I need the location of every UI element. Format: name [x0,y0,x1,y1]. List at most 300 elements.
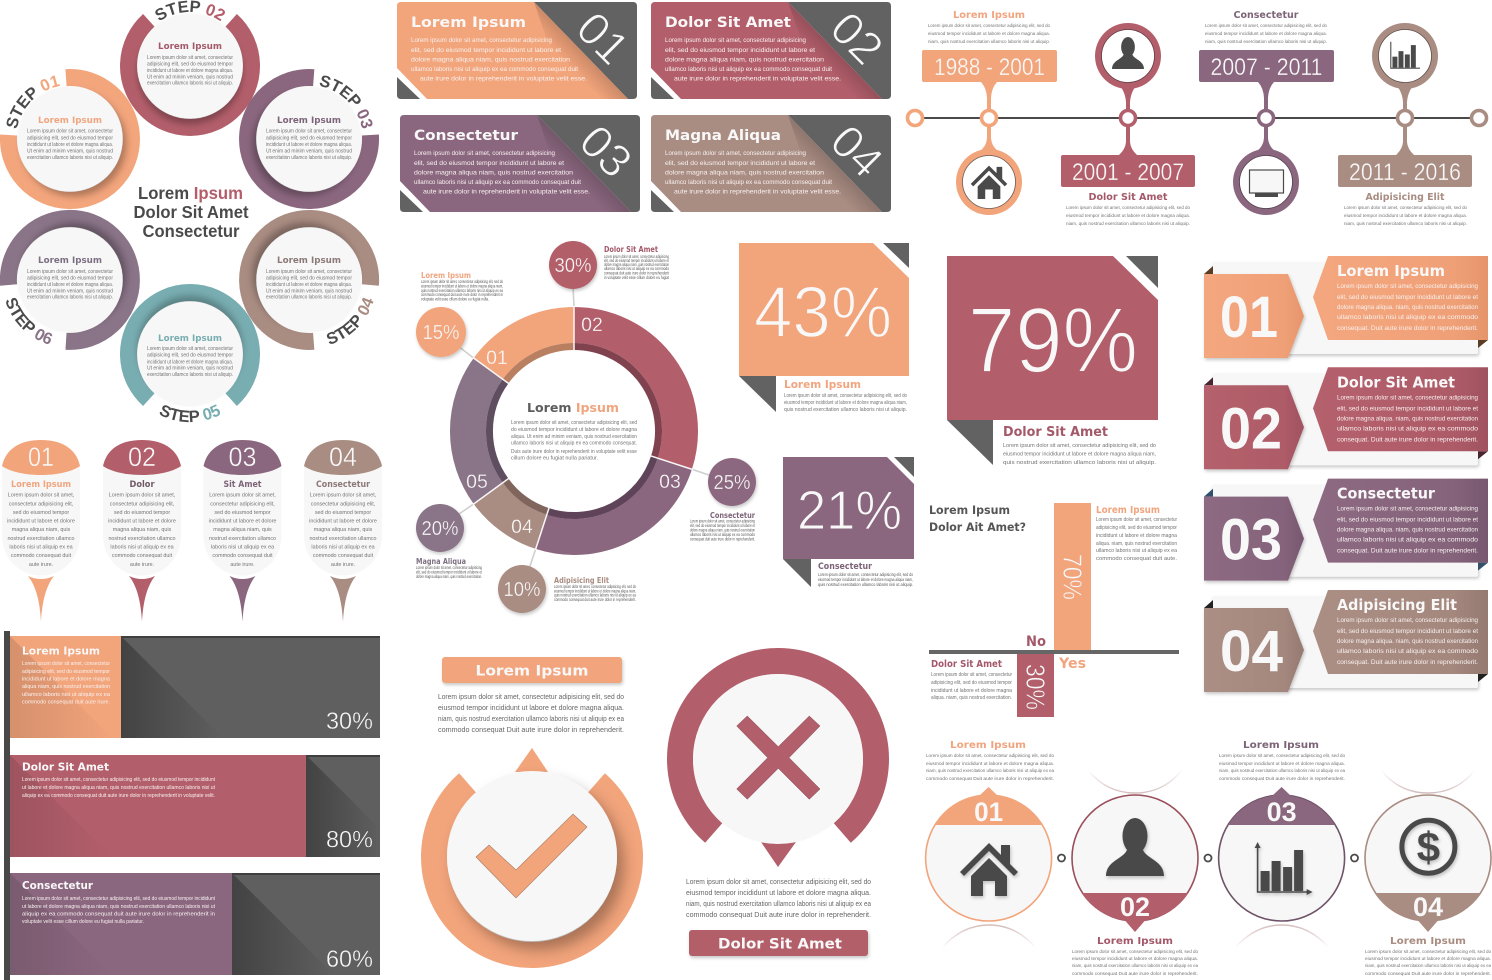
icon: monitor [1250,170,1284,197]
icon: home [960,843,1018,896]
card 03: Consectetur [414,127,519,144]
text: Lorem Ipsum: ullamco laboris nisi ut aliquip ex ea [1096,548,1177,554]
bar 60%: Lorem ipsum dolor sit amet, consectetur adipisicing elit, sed do eiusmod tempor incididunt [22,896,215,902]
panel: arrow banner list [1204,256,1488,692]
panel: horizontal progress bars [4,631,380,980]
circle 04: commodo consequat Duit aute irure dolor in reprehenderit. [1365,971,1491,977]
period 2007-2011 [1199,10,1334,215]
cross text: niam, quis nostrud exercitation ullamco laboris nisi ut aliquip ex ea [686,901,871,908]
cross ring [680,661,876,867]
period 2007-2011: eiusmod tempor incididunt ut labore et dolore magna aliqua. [1205,31,1327,36]
row 02: Dolor Sit Amet [1337,373,1455,391]
pin 03: 03 [228,442,256,472]
text: Lorem Ipsum: commodo consequat duit aute. [1096,556,1177,562]
text: Dolor Sit Amet: aliqua. niam, quis nostrud exercitation. [931,695,1012,701]
circle 02: 02 [1120,892,1150,922]
panel: cross mark [680,661,876,956]
row 04: Adipisicing Elit [1337,596,1457,614]
connector dots [1058,854,1358,862]
cross text [686,879,871,919]
circle 01: eiusmod tempor incididunt ut labore et dolore magna aliqua. [926,761,1054,767]
pin 03: laboris nisi ut aliquip ex ea [211,545,274,551]
label: Lorem Ipsum 15%: Lorem ipsum dolor sit amet, consectetur adipisicing elit, sed do [421,279,503,284]
check text: eiusmod tempor incididunt ut labore et dolore magna aliqua. [438,705,624,712]
step 05 circle: exercitation ullamco laboris nisi ut aliquip. [147,372,233,378]
panel: percent box 79%: eiusmod tempor incididunt ut labore et dolore magna aliqua niam, [1003,452,1156,458]
check ring [434,748,630,955]
bar 80%: Lorem ipsum dolor sit amet, consectetur adipisicing elit, sed do eiusmod tempor incididunt [22,777,215,783]
step 03 circle: exercitation ullamco laboris nisi ut aliquip. [266,155,352,161]
step 03 circle: adipisicing elit, sed do eiusmod tempor [266,135,352,141]
card 01: aute irure dolor in reprehenderit in voluptate velit esse. [420,76,587,82]
circle 03: niam, quis nostrud exercitation ullamco laboris nisi ut aliquip ex ea [1219,768,1345,774]
cross text: commodo consequat Duit aute irure dolor in reprehenderit. [686,912,871,919]
pin 03 [204,440,282,622]
pin 03: magna aliqua niam, quis [213,527,272,533]
icon: dollar coin: $ [1417,824,1440,870]
row 03: Consectetur [1337,485,1436,503]
row 03: 03 [1220,508,1282,573]
pin 03: sed do eiusmod tempor [214,510,271,516]
row 04: Lorem ipsum dolor sit amet, consectetur adipisicing [1337,617,1478,624]
row 03: elit, sed do eiusmod tempor incididunt ut labore et [1337,517,1478,524]
center title: Lorem Ipsum [138,183,243,203]
pin 04: consectetur adipisicing elit, [311,501,376,507]
card 03: dolore magna aliqua niam, quis nostrud exercitation [414,170,574,176]
question heading: Dolor Ait Amet? [929,520,1026,534]
row 02: ullamco laboris nisi ut aliquip ex ea commodo [1337,425,1478,432]
axis labels: No [1026,634,1046,650]
card 04: aute irure dolor in reprehenderit in voluptate velit esse. [674,188,841,196]
pin 04: incididunt ut labore et dolore [309,519,377,525]
check text: commodo consequat Duit aute irure dolor in reprehenderit. [438,727,624,734]
step 04 circle: Lorem ipsum dolor sit amet, consectetur [266,269,352,275]
row 02: Lorem ipsum dolor sit amet, consectetur adipisicing [1337,394,1478,401]
panel: percent box 21% [783,457,914,587]
circle 03: eiusmod tempor incididunt ut labore et dolore magna aliqua. [1219,761,1345,767]
donut center: ullamco laboris nisi ut aliquip ex ea commodo consequat. [511,440,637,446]
donut center: Lorem Ipsum [527,400,619,415]
bar 80%: Dolor Sit Amet [22,762,109,774]
period 2011-2016: 2011 - 2016 [1349,159,1461,186]
cross text: eiusmod tempor incididunt ut labore et dolore magna aliqua. [686,890,871,897]
circle 01: 01 [974,797,1003,827]
step 02 circle: Lorem Ipsum [158,42,222,52]
pin 02: Lorem ipsum dolor sit amet, [109,493,176,499]
row 01: ullamco laboris nisi ut aliquip ex ea commodo [1337,314,1478,321]
step 06 circle: exercitation ullamco laboris nisi ut aliquip. [27,295,113,301]
label: Adipisicing Elit 10%: commodo consequat duit aute irure dolor in reprehenderit. [554,597,636,602]
step 02 circle: incididunt ut labore et dolore magna aliqua. [147,68,233,74]
text: Lorem Ipsum: aliqua. niam, quis nostrud exercitation [1096,541,1177,547]
pin 04: laboris nisi ut aliquip ex ea [311,545,375,551]
panel: six step circle diagram [0,0,380,422]
label: Dolor Sit Amet 30%: elit, sed do eiusmod tempor incididunt ut labore et [604,258,670,263]
label: Consectetur 25%: Lorem ipsum dolor sit amet, consectetur adipisicing [690,518,755,524]
period 2011-2016: eiusmod tempor incididunt ut labore et dolore magna aliqua. [1344,213,1467,218]
row 02: consequat. Duit aute irure dolor in reprehenderit. [1337,436,1478,443]
percent bubbles: 15% [422,322,460,344]
card 01: elit, sed do eiusmod tempor incididunt ut labore et [411,47,561,54]
icon: bar chart [1391,42,1420,68]
bar 60%: aliquip ex ea commodo consequat duit aute irure dolor in reprehenderit in [22,912,215,918]
label: Magna Aliqua 20%: Magna Aliqua [416,557,466,566]
circle 01: niam, quis nostrud exercitation ullamco laboris nisi ut aliquip ex ea [926,768,1054,774]
banner: Lorem Ipsum [442,657,622,683]
pin 04: Lorem ipsum dolor sit amet, [310,493,377,499]
step 03 circle: Lorem Ipsum [277,116,341,126]
step 02 circle: Lorem ipsum dolor sit amet, consectetur [147,55,233,61]
label: Adipisicing Elit 10%: eiusmod tempor incididunt ut labore et dolore magna aliqua niam, [554,588,636,594]
panel: percent box 21%: Consectetur [818,562,873,572]
panel: percent box 79% [947,256,1158,466]
row 01: Lorem Ipsum [1337,262,1445,280]
card 02: Dolor Sit Amet [665,14,791,31]
step 05 circle: incididunt ut labore et dolore magna aliqua. [147,359,233,365]
period 2001-2007: Lorem ipsum dolor sit amet, consectetur adipisicing elit, sed do [1066,205,1190,210]
circle 01: Lorem ipsum dolor sit amet, consectetur adipisicing elit, sed do [926,753,1054,759]
question heading [929,503,1026,534]
row 01: elit, sed do eiusmod tempor incididunt ut labore et [1337,294,1478,301]
percent bubbles: 25% [714,472,751,494]
circle 01: Lorem Ipsum [950,740,1026,751]
row 04 [1204,590,1488,692]
row 03 [1204,479,1488,581]
panel: percent box 21%: 21% [797,479,902,541]
pin 01: laboris nisi ut aliquip ex ea [9,545,73,551]
label: Dolor Sit Amet 30%: dolore magna aliqua niam, quis nostrud exercitation [604,262,669,267]
pin 02: nostrud exercitation ullamco [108,536,176,542]
period 2001-2007: Dolor Sit Amet [1088,192,1168,203]
text: Lorem Ipsum [1096,505,1177,562]
pin 04 [304,440,382,622]
pin 02: magna aliqua niam, quis [113,527,172,533]
step 05 circle [120,284,260,422]
label: Dolor Sit Amet 30%: in voluptate velit esse cillum dolore eu fugiat [604,275,670,280]
label: Consectetur 25%: dolore magna aliqua niam, quis nostrud exercitation [690,528,755,532]
bar 60%: Consectetur [22,880,94,892]
card 01: Lorem ipsum dolor sit amet, consectetur adipisicing [411,37,553,44]
percent bubbles: 20% [422,518,459,540]
banner: Dolor Sit Amet: Dolor Sit Amet [718,936,842,952]
text: Dolor Sit Amet: Dolor Sit Amet [931,659,1002,670]
bar: no 30% [1017,654,1054,717]
card 02 [651,2,893,99]
pin 03: Sit Amet [224,480,262,490]
bar 30%: 30% [326,708,373,735]
step 01 circle: STEP 01 [6,76,60,128]
circle 02: niam, quis nostrud exercitation ullamco laboris nisi ut aliquip ex ea [1072,963,1198,969]
segment numbers: 04 [511,516,533,538]
pin 03: incididunt ut labore et dolore [209,519,276,525]
text: Lorem Ipsum: Lorem Ipsum [1096,505,1160,516]
timeline start and end nodes [908,110,1486,126]
step 02 circle: adipisicing elit, sed do eiusmod tempor [147,62,233,68]
percent bubbles: 10% [504,579,541,601]
card 04: elit, sed do eiusmod tempor incididunt ut labore et [665,160,815,167]
circle 04 [1365,795,1491,977]
period 2007-2011: 2007 - 2011 [1210,54,1322,81]
bar 80%: aliquip ex ea commodo consequat duit aute irure dolor in reprehenderit in voluptate velit. [22,793,215,799]
panel: percent box 79%: 79% [968,288,1138,392]
period 2011-2016: niam, quis nostrud exercitation ullamco laboris nisi ut aliquip. [1344,221,1467,226]
circle 02: Lorem Ipsum [1097,936,1173,947]
circle 01: commodo consequat Duit aute irure dolor in reprehenderit. [926,776,1054,782]
bar 30%: aliqua niam, quis nostrud exercitation [22,684,110,690]
step 01 circle: Ut enim ad minim veniam, quis nostrud [27,148,113,154]
bar 30%: incididunt ut labore et dolore magna [22,676,110,682]
pin 01: 01 [28,442,54,472]
step 03 circle: STEP 03 [320,76,372,128]
label: Consectetur 25% [690,511,756,542]
row 04: 04 [1220,619,1283,684]
circle 02: commodo consequat Duit aute irure dolor in reprehenderit. [1072,971,1198,977]
timeline axis [915,117,1479,119]
icon: check mark [476,814,587,898]
segment numbers: 02 [581,314,603,336]
bar 60%: ut labore et dolore magna aliqua niam, quis nostrud exercitation ullamco laboris nisi ut [22,904,215,910]
panel: pin columns [2,440,382,622]
pin 04: aute irure. [331,562,355,568]
panel: four folded cards [397,2,893,212]
question heading: Lorem Ipsum [929,503,1010,517]
center title [134,183,249,241]
card 04: ullamco laboris nisi ut aliquip ex ea commodo consequat duit [665,179,832,186]
bar 80% [10,755,380,857]
bar 60%: voluptate velit esse cillum dolore eu fugiat nulla pariatur. [22,919,144,925]
pin 01: Lorem ipsum dolor sit amet, [8,493,75,499]
label: Adipisicing Elit 10% [554,576,636,602]
card 02: ullamco laboris nisi ut aliquip ex ea commodo consequat duit [665,66,832,73]
circle 03: Lorem ipsum dolor sit amet, consectetur adipisicing elit, sed do [1219,753,1345,759]
step 05 circle: Lorem Ipsum [158,334,222,344]
step 02 circle: exercitation ullamco laboris nisi ut aliquip. [147,81,233,87]
bar: yes 70%: 70% [1058,554,1088,600]
circle 01 [926,740,1054,921]
panel: percent box 79%: Lorem ipsum dolor sit amet, consectetur adipisicing elit, sed do [1003,443,1156,449]
icon: dollar coin [1402,820,1455,873]
label: Dolor Sit Amet 30%: consequat duit aute irure dolor in reprehenderit [604,270,670,276]
panel: percent box 43%: Lorem Ipsum [784,379,861,391]
label: Consectetur 25%: ullamco laboris nisi ut aliquip ex ea commodo [690,532,756,537]
card 04: Magna Aliqua [665,127,781,144]
card 04: Lorem ipsum dolor sit amet, consectetur adipisicing [665,150,807,157]
pin 01: nostrud exercitation ullamco [7,536,75,542]
pin 03: Lorem ipsum dolor sit amet, [209,493,276,499]
panel: numbered icon circles [926,740,1491,977]
step 06 circle [0,210,140,350]
row 01: consequat. Duit aute irure dolor in reprehenderit. [1337,325,1478,332]
percent bubbles [416,241,756,613]
step 03 circle [239,69,379,209]
text: Dolor Sit Amet: incididunt ut labore et dolore magna [931,688,1012,694]
segment numbers [466,314,681,538]
label: Magna Aliqua 20%: dolore magna aliqua niam, quis nostrud exercitation. [416,574,482,579]
period 2007-2011: Consectetur [1234,10,1299,21]
step 04 circle: exercitation ullamco laboris nisi ut aliquip. [266,295,352,301]
row 04: ullamco laboris nisi ut aliquip ex ea commodo [1337,648,1478,655]
label: Lorem Ipsum 15%: Lorem Ipsum [421,271,471,280]
period 2007-2011: niam, quis nostrud exercitation ullamco laboris nisi ut aliquip. [1205,39,1327,44]
pin 02: consectetur adipisicing elit, [110,501,175,507]
card 03 [400,115,642,212]
card 03: ullamco laboris nisi ut aliquip ex ea commodo consequat duit [414,179,581,186]
bar 80%: ut labore et dolore magna aliqua niam, quis nostrud exercitation ullamco laboris nisi ut [22,785,215,791]
bar: yes 70% [1054,503,1091,650]
panel: percent box 43%: eiusmod tempor incididunt ut labore et dolore magna aliqua niam, [784,400,907,406]
panel: percent box 21%: Lorem ipsum dolor sit amet, consectetur adipisicing elit, sed do [818,572,913,577]
donut center: cillum dolore eu fugiat nulla pariatur. [511,456,598,462]
text: Lorem Ipsum: Lorem ipsum dolor sit amet, consectetur [1096,517,1177,523]
label: Consectetur 25%: elit, sed do eiusmod tempor incididunt ut labore et [690,523,756,528]
panel: donut chart [416,241,756,613]
step 01 circle: Lorem Ipsum [38,116,102,126]
step 06 circle: STEP 06 [6,298,52,344]
pin 01: Lorem Ipsum [11,480,71,490]
pin 04: magna aliqua niam, quis [314,527,373,533]
step 03 circle: Lorem ipsum dolor sit amet, consectetur [266,129,352,135]
card 02: Lorem ipsum dolor sit amet, consectetur adipisicing [665,37,807,44]
card 01: dolore magna aliqua niam, quis nostrud exercitation [411,56,571,64]
label: Magna Aliqua 20%: elit, sed do eiusmod tempor incididunt ut labore et [416,570,483,574]
pin 01: aute irure. [29,562,53,568]
label: Magna Aliqua 20%: Lorem ipsum dolor sit amet, consectetur adipisicing [416,565,482,570]
pin 04: 04 [329,442,357,472]
circle 04: Lorem Ipsum [1390,936,1466,947]
banner: Lorem Ipsum: Lorem Ipsum [476,662,588,680]
pin 01: sed do eiusmod tempor [13,510,69,516]
step 02 circle: Ut enim ad minim veniam, quis nostrud [147,74,233,80]
step 06 circle: Ut enim ad minim veniam, quis nostrud [27,288,113,294]
pin 02: incididunt ut labore et dolore [108,519,176,525]
card 03: 03 [570,115,642,187]
card 03: aute irure dolor in reprehenderit in voluptate velit esse. [423,188,590,196]
label: Lorem Ipsum 15%: commodo consequat duit aute irure dolor in reprehenderit in [421,292,503,297]
label: Lorem Ipsum 15%: quis nostrud exercitation ullamco laboris nisi ut aliquip ex ea [421,288,503,293]
panel: percent box 79%: quis nostrud exercitation ullamco laboris nisi ut aliquip. [1003,460,1156,466]
period 1988-2001: niam, quis nostrud exercitation ullamco laboris nisi ut aliquip. [928,39,1050,44]
donut center [494,350,654,512]
period 1988-2001 [922,10,1057,215]
circle 02: eiusmod tempor incididunt ut labore et dolore magna aliqua. [1072,956,1198,962]
step 04 circle: incididunt ut labore et dolore magna aliqua. [266,282,352,288]
icon: person [1112,37,1144,69]
pin 03: aute irure. [230,562,255,568]
step 06 circle: incididunt ut labore et dolore magna aliqua. [27,282,113,288]
card 04 [651,115,893,212]
pin 04: Consectetur [316,480,371,490]
panel: percent box 43%: quis nostrud exercitation ullamco laboris nisi ut aliquip. [784,407,907,413]
text: Lorem Ipsum: adipisicing elit, sed do eiusmod tempor [1096,525,1177,531]
card 01 [397,2,639,99]
row 04: consequat. Duit aute irure dolor in reprehenderit. [1337,659,1478,666]
panel: yes no chart [929,503,1179,717]
panel: percent box 21%: eiusmod tempor incididunt ut labore et dolore magna aliqua niam, [818,577,913,582]
pin 04: commodo consequat duit [313,553,374,559]
row 03: Lorem ipsum dolor sit amet, consectetur adipisicing [1337,506,1478,513]
period 2011-2016: Adipisicing Elit [1366,192,1445,203]
circle 03: commodo consequat Duit aute irure dolor in reprehenderit. [1219,776,1345,782]
step 05 circle: Ut enim ad minim veniam, quis nostrud [147,366,233,372]
bar 60% [10,873,380,975]
label: Dolor Sit Amet 30%: ullamco laboris nisi ut aliquip ex ea commodo [604,266,670,271]
row 01: dolore magna aliqua. niam, quis nostrud exercitation [1337,304,1478,311]
axis labels: Yes [1058,656,1086,672]
row 03: consequat. Duit aute irure dolor in reprehenderit. [1337,548,1478,555]
circle 03: Lorem Ipsum [1243,740,1319,751]
pin 01 [2,440,80,622]
label: Lorem Ipsum 15%: voluptate velit esse cillum dolore eu fugiat nulla. [421,296,489,302]
panel: percent box 21%: quis nostrud exercitation ullamco laboris nisi ut aliquip. [818,582,913,587]
card 01: Lorem Ipsum [411,14,526,31]
row 03: ullamco laboris nisi ut aliquip ex ea commodo [1337,537,1478,544]
bar axis pole [4,631,10,980]
bar 30%: Lorem Ipsum [22,646,100,658]
donut segments [468,325,680,537]
label: Dolor Sit Amet 30%: Dolor Sit Amet [604,245,658,254]
label: Lorem Ipsum 15% [421,271,503,302]
circle 03 [1219,740,1345,921]
step 06 circle: Lorem ipsum dolor sit amet, consectetur [27,269,113,275]
step 04 circle: STEP 04 [326,298,374,344]
label: Magna Aliqua 20% [416,557,483,579]
period 2001-2007: 2001 - 2007 [1072,159,1184,186]
axis labels [1026,634,1086,672]
circle 04: eiusmod tempor incididunt ut labore et dolore magna aliqua. [1365,956,1491,962]
circle reflections [942,770,1475,948]
bar: no 30%: 30% [1020,664,1050,710]
icon: cross mark [737,716,820,799]
pin 03: commodo consequat duit [212,553,273,559]
icon: bar chart [1255,842,1313,895]
segment numbers: 03 [659,471,681,493]
step 01 circle: adipisicing elit, sed do eiusmod tempor [27,135,113,141]
donut center: Lorem ipsum dolor sit amet, consectetur adipisicing elit, sed [511,420,637,426]
banner: Dolor Sit Amet [689,930,868,956]
step 05 circle: Lorem ipsum dolor sit amet, consectetur [147,346,233,352]
step 02 circle [120,0,260,136]
label: Dolor Sit Amet 30%: Lorem ipsum dolor sit amet, consectetur adipisicing [604,254,669,259]
row 02 [1204,367,1488,469]
row 01: 01 [1220,285,1278,350]
text: Dolor Sit Amet: Lorem ipsum dolor sit amet, consectetur [931,672,1012,678]
step 03 circle: Ut enim ad minim veniam, quis nostrud [266,148,352,154]
step 01 circle: exercitation ullamco laboris nisi ut aliquip. [27,155,113,161]
period 1988-2001: Lorem Ipsum [953,10,1025,21]
step 06 circle: Lorem Ipsum [38,256,102,266]
panel: percent box 79%: Dolor Sit Amet [1003,424,1109,440]
card 03: elit, sed do eiusmod tempor incididunt ut labore et [414,160,564,167]
pin 02: sed do eiusmod tempor [114,510,170,516]
text: Dolor Sit Amet [931,659,1012,701]
pin 02: Dolor [130,480,155,490]
icon: person [1106,818,1164,876]
row 01: Lorem ipsum dolor sit amet, consectetur adipisicing [1337,283,1478,290]
pin 02: 02 [128,442,156,472]
period 1988-2001: 1988 - 2001 [934,54,1045,81]
pin 03: consectetur adipisicing elit, [210,501,275,507]
donut center: Duis aute irure dolor in reprehenderit in voluptate velit esse [511,449,637,455]
step 03 circle: incididunt ut labore et dolore magna aliqua. [266,142,352,148]
card 04: dolore magna aliqua niam, quis nostrud exercitation [665,170,825,176]
donut center: do eiusmod tempor incididunt ut labore et dolore magna [511,427,637,433]
period 2007-2011: Lorem ipsum dolor sit amet, consectetur adipisicing elit, sed do [1205,23,1327,28]
pin 04: nostrud exercitation ullamco [309,536,377,542]
step 04 circle [239,210,380,350]
step 01 circle: incididunt ut labore et dolore magna aliqua. [27,142,113,148]
panel: timeline [908,10,1486,226]
row 04: elit, sed do eiusmod tempor incididunt ut labore et [1337,628,1478,635]
